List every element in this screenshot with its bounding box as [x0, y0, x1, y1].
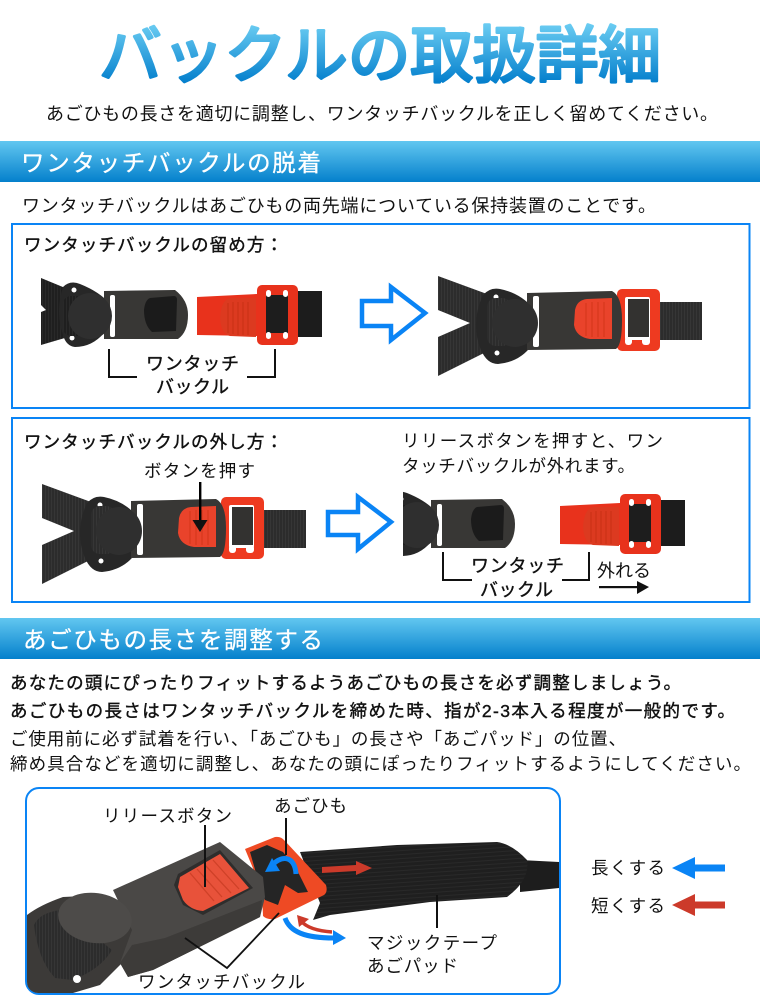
arrow: press down — [192, 482, 208, 532]
bold instructions: あなたの頭にぴったりフィットするようあごひもの長さを必ず調整しましょう。 — [10, 673, 681, 693]
buckle label with bracket — [109, 349, 275, 397]
label: chin strap — [274, 796, 347, 855]
label: velcro chin pad — [367, 895, 498, 976]
label: release button — [103, 806, 232, 887]
release explanation — [402, 431, 663, 476]
subtitle: あごひもの長さを適切に調整し、ワンタッチバックルを正しく留めてください。 — [46, 104, 718, 124]
release explanation: タッチバックルが外れます。 — [402, 456, 635, 476]
buckle label with bracket — [443, 552, 589, 600]
buckle label with bracket: バックル — [480, 580, 553, 600]
section header: buckle attach and detach: ワンタッチバックルの脱着 — [21, 150, 321, 176]
label: velcro chin pad: マジックテープ — [367, 933, 498, 953]
usage notes — [10, 729, 751, 774]
label: comes off: 外れる — [597, 561, 651, 581]
arrow: release direction — [328, 497, 391, 549]
label: velcro chin pad: あごパッド — [367, 956, 458, 976]
usage notes: 締め具合などを適切に調整し、あなたの頭にぽったりフィットするようにしてください。 — [10, 754, 751, 774]
panel heading: how to fasten: ワンタッチバックルの留め方： — [24, 235, 283, 255]
photo: buckle close-up — [27, 837, 559, 993]
photo: detached dark half — [403, 492, 515, 556]
label: press button: ボタンを押す — [144, 461, 255, 481]
label: release button: リリースボタン — [103, 806, 232, 826]
legend: longer: 長くする — [591, 858, 665, 878]
panel: strap adjustment diagram — [26, 788, 560, 994]
arrow: fasten direction — [362, 287, 425, 340]
panel: how to fasten — [12, 224, 750, 408]
buckle label with bracket: ワンタッチ — [471, 556, 564, 576]
bold instructions: あごひもの長さはワンタッチバックルを締めた時、指が2-3本入る程度が一般的です。 — [10, 701, 735, 721]
section header: adjust chin strap — [0, 618, 760, 659]
section header: buckle attach and detach — [0, 141, 760, 182]
arrow: comes off — [599, 581, 649, 594]
label: chin strap: あごひも — [274, 796, 347, 816]
legend: shorter — [591, 894, 725, 916]
label: one-touch buckle: ワンタッチバックル — [138, 972, 305, 992]
photo: detached red half — [560, 494, 685, 554]
release explanation: リリースボタンを押すと、ワン — [402, 431, 663, 451]
legend: longer — [591, 857, 725, 879]
panel heading: how to release: ワンタッチバックルの外し方： — [24, 432, 283, 452]
photo: joined buckle — [438, 276, 702, 376]
buckle label with bracket: バックル — [156, 377, 229, 397]
label: one-touch buckle — [138, 913, 305, 992]
section header: adjust chin strap: あごひもの長さを調整する — [23, 627, 323, 653]
intro text: ワンタッチバックルはあごひもの両先端についている保持装置のことです。 — [22, 196, 656, 216]
photo: joined buckle pressed — [42, 484, 306, 584]
bold instructions — [10, 673, 735, 721]
panel: how to release — [12, 418, 750, 602]
photo: separated buckle — [41, 278, 322, 347]
usage notes: ご使用前に必ず試着を行い、「あごひも」の長さや「あごパッド」の位置、 — [10, 729, 626, 749]
title: バックルの取扱詳細 — [99, 22, 661, 91]
arrows: adjustment movement — [265, 858, 372, 945]
buckle label with bracket: ワンタッチ — [146, 354, 239, 374]
legend: shorter: 短くする — [591, 896, 665, 916]
